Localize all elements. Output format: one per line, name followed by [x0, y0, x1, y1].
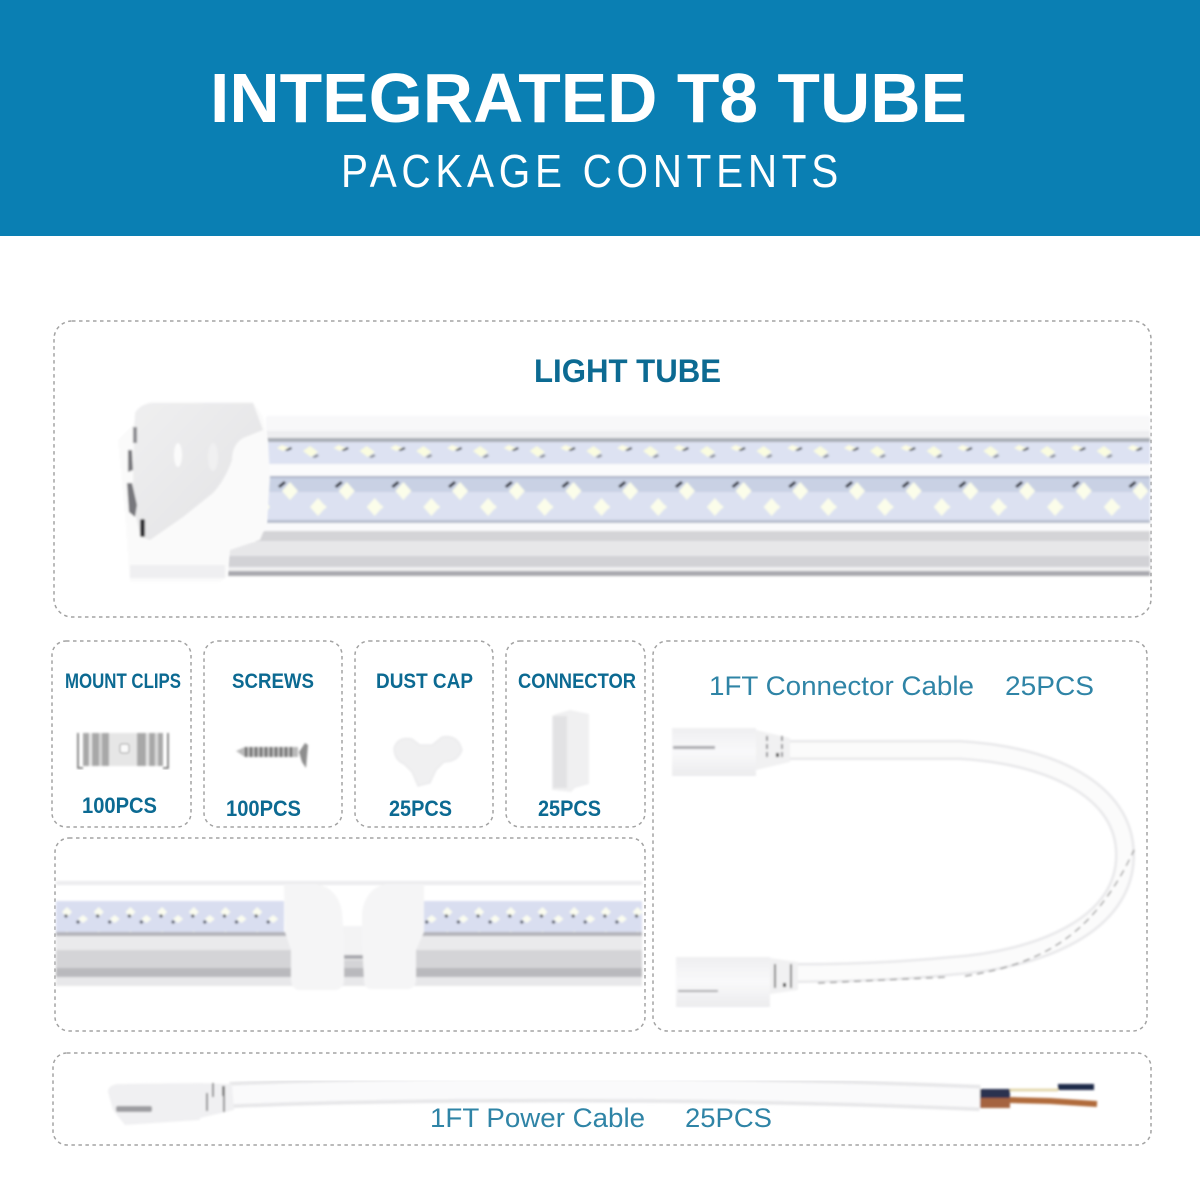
label: dust cap: DUST CAP — [376, 670, 473, 693]
image: right clamp — [362, 884, 424, 989]
panel: light tube — [54, 321, 1151, 617]
panel: screws — [204, 641, 342, 827]
label: connector: CONNECTOR — [518, 670, 636, 693]
panel: power cable — [53, 1053, 1151, 1145]
count: power cable: 25PCS — [685, 1103, 772, 1133]
image: center pin — [338, 926, 368, 960]
image: left clamp — [284, 884, 344, 990]
panel: connector — [506, 641, 645, 827]
icon: connector — [552, 710, 589, 792]
image: connector cable — [672, 728, 1134, 1007]
count: mount clips: 100PCS — [82, 793, 157, 818]
label: mount clips: MOUNT CLIPS — [65, 670, 181, 693]
icon: screw — [236, 743, 308, 768]
heading: light tube: LIGHT TUBE — [534, 353, 721, 389]
image: two joined tubes — [56, 881, 642, 990]
count: screws: 100PCS — [226, 796, 301, 821]
image: tube end cap — [118, 402, 270, 582]
label: power cable: 1FT Power Cable — [430, 1103, 645, 1133]
panel: dust cap — [355, 641, 493, 827]
image: tube body with LEDs — [228, 416, 1150, 576]
panel: mount clips — [52, 641, 191, 827]
count: connector cable: 25PCS — [1005, 671, 1094, 701]
panel: connector cable — [653, 641, 1147, 1031]
image: power cable — [108, 1083, 1097, 1125]
label: connector cable: 1FT Connector Cable — [709, 671, 974, 701]
title: INTEGRATED T8 TUBE — [210, 59, 967, 137]
label: screws: SCREWS — [232, 670, 314, 693]
count: connector: 25PCS — [538, 796, 601, 821]
subtitle: PACKAGE CONTENTS — [341, 147, 838, 198]
count: dust cap: 25PCS — [389, 796, 452, 821]
icon: dust cap — [394, 737, 462, 786]
panel: tube connection — [55, 838, 645, 1031]
icon: mount clip — [78, 733, 168, 768]
header banner — [0, 0, 1200, 236]
